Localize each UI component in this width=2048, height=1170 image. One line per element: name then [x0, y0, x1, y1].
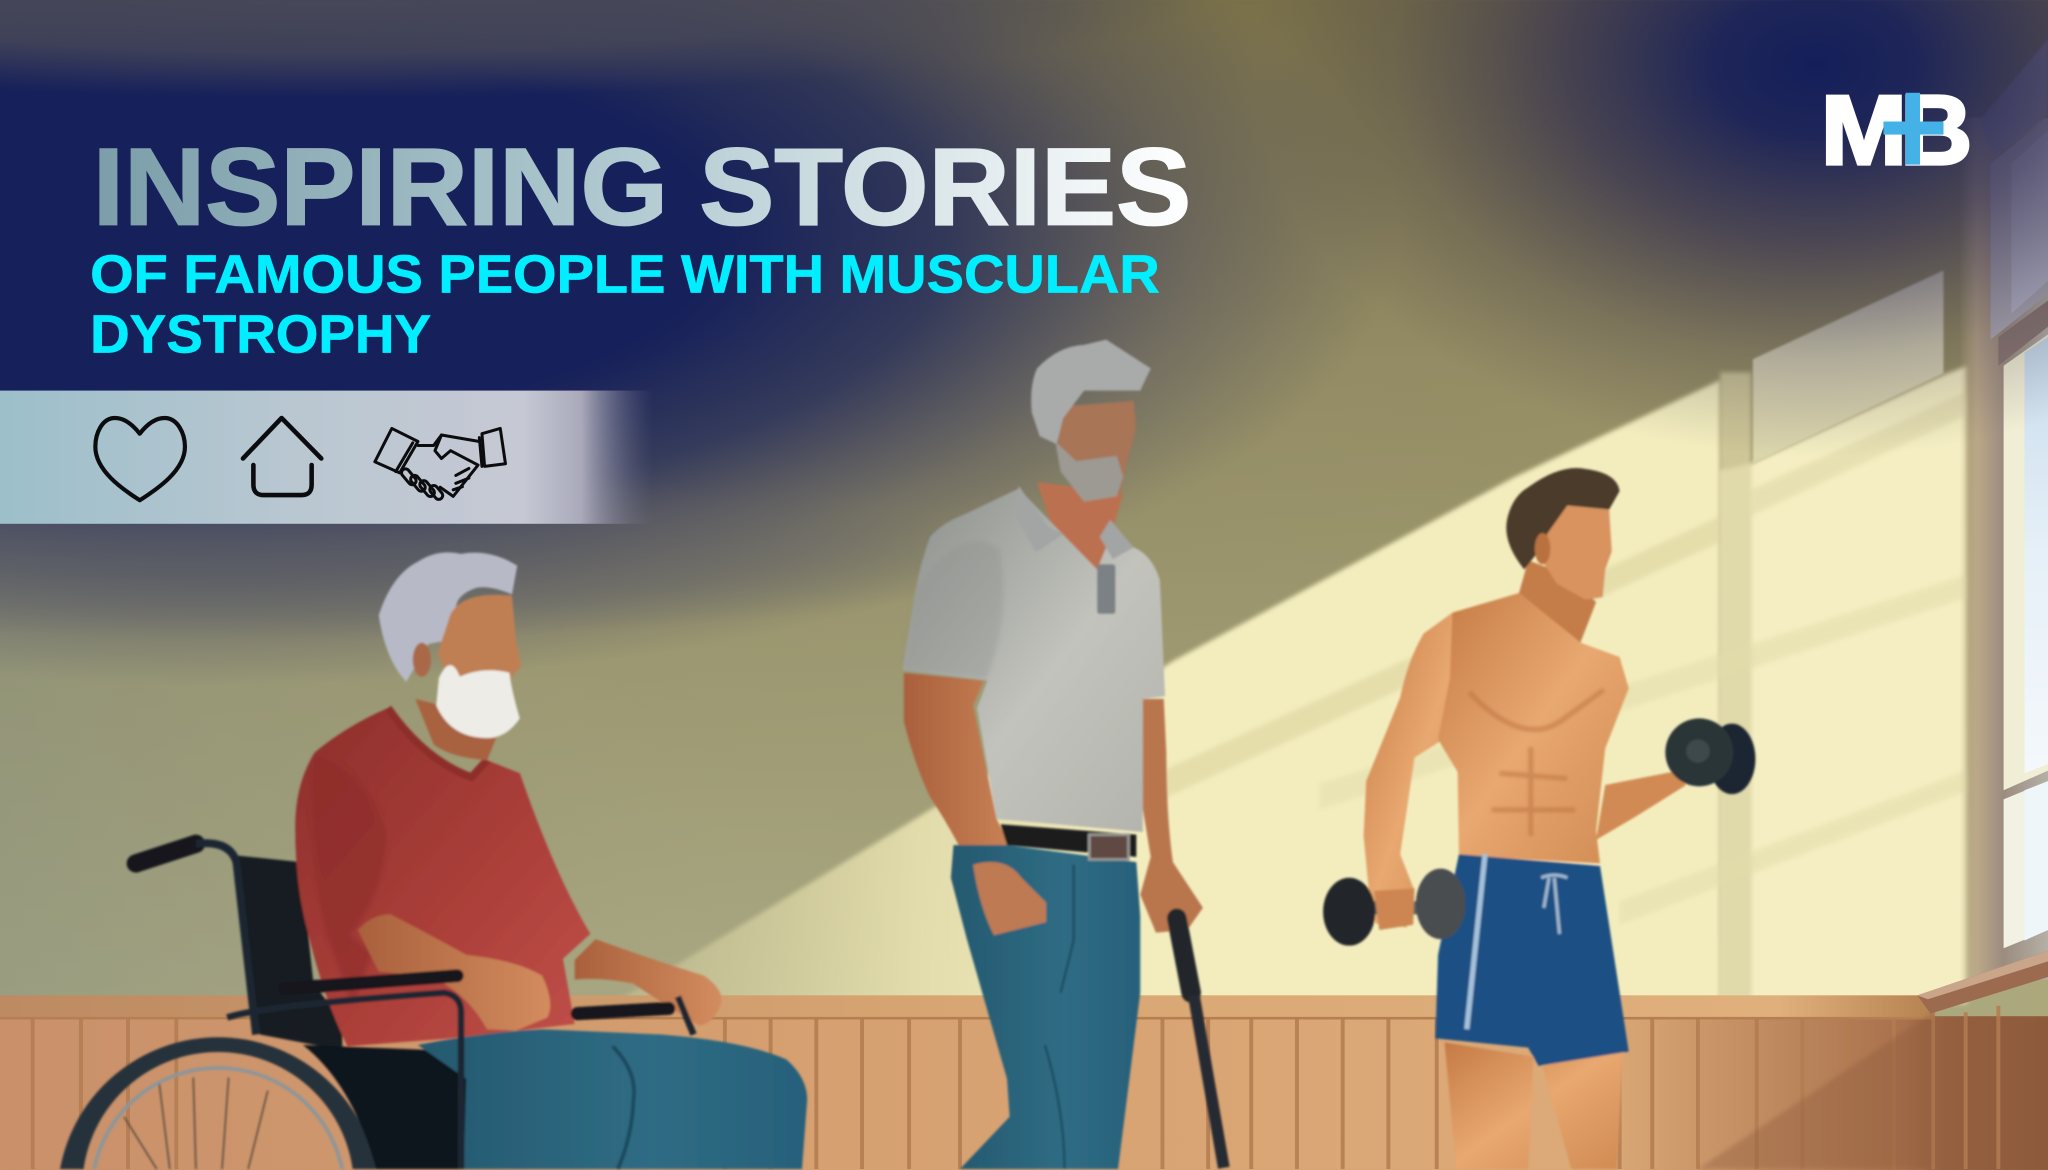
- face: [438, 595, 521, 686]
- figure: man in wheelchair: [60, 552, 807, 1169]
- right arm: [1136, 699, 1203, 933]
- belt: [1000, 824, 1136, 857]
- raised dumbbell: [1665, 718, 1755, 794]
- drawstring: [1541, 875, 1567, 934]
- forearm: [1596, 772, 1686, 840]
- wood wainscot: [0, 995, 2048, 1170]
- ear: [1535, 533, 1550, 564]
- belt buckle: [1089, 835, 1128, 859]
- sleeve shading: [903, 541, 1004, 679]
- far forearm: [575, 939, 722, 1025]
- ear: [413, 643, 431, 677]
- pants: [418, 1029, 807, 1169]
- collar: [388, 708, 487, 777]
- neck: [415, 699, 503, 760]
- lower dumbbell: [1323, 869, 1465, 946]
- jeans: [951, 845, 1140, 1169]
- figure: man with dumbbells: [1323, 468, 1755, 1169]
- logo: B: [1900, 75, 1972, 185]
- collar: [1015, 486, 1134, 559]
- hair: [1031, 340, 1151, 444]
- navy gradient overlay: right: [1176, 0, 2048, 549]
- left arm: [1364, 613, 1469, 927]
- logo: [1821, 75, 1972, 185]
- top gray haze: [0, 0, 1228, 105]
- window sill: [1917, 951, 2048, 1014]
- hair: [379, 552, 517, 682]
- polo shirt: [903, 489, 1165, 832]
- wheelchair back and handle: [136, 843, 342, 1050]
- icon band: [0, 391, 653, 524]
- subtitle: DYSTROPHY: [90, 306, 431, 365]
- legs: [1445, 1042, 1624, 1169]
- icon: house: [243, 418, 321, 495]
- wheelchair wheel: [60, 1037, 376, 1169]
- beard: [436, 665, 520, 738]
- hand at pocket: [973, 862, 1046, 935]
- left arm: [904, 673, 1046, 935]
- placket: [1097, 564, 1115, 614]
- lower haze under band: [0, 468, 1032, 644]
- hair: [1506, 468, 1620, 570]
- neck: [1519, 560, 1596, 643]
- seat: [303, 1045, 468, 1169]
- face: [1539, 506, 1612, 600]
- sunlight on wall: [614, 270, 1967, 1003]
- logo: M: [1821, 75, 1907, 185]
- shirt shading: [311, 755, 387, 1006]
- title: INSPIRING STORIES: [93, 127, 1191, 249]
- icon: handshake: [375, 428, 505, 501]
- near forearm: [358, 914, 550, 1031]
- neck: [1037, 482, 1123, 570]
- icon: heart: [95, 418, 185, 500]
- figure: standing man with cane: [903, 340, 1224, 1169]
- torso: [1438, 593, 1629, 863]
- armrests and frame: [227, 976, 694, 1169]
- shorts stripe: [1467, 854, 1485, 1029]
- face: [1057, 401, 1136, 494]
- shorts: [1435, 854, 1629, 1066]
- red shirt: [295, 708, 590, 1046]
- chest shading: [1469, 690, 1604, 836]
- subtitle: [90, 246, 1160, 365]
- window frame and panes: [1959, 39, 2048, 980]
- beard: [1055, 442, 1123, 502]
- subtitle: OF FAMOUS PEOPLE WITH MUSCULAR: [90, 246, 1160, 305]
- cane: [1177, 918, 1224, 1168]
